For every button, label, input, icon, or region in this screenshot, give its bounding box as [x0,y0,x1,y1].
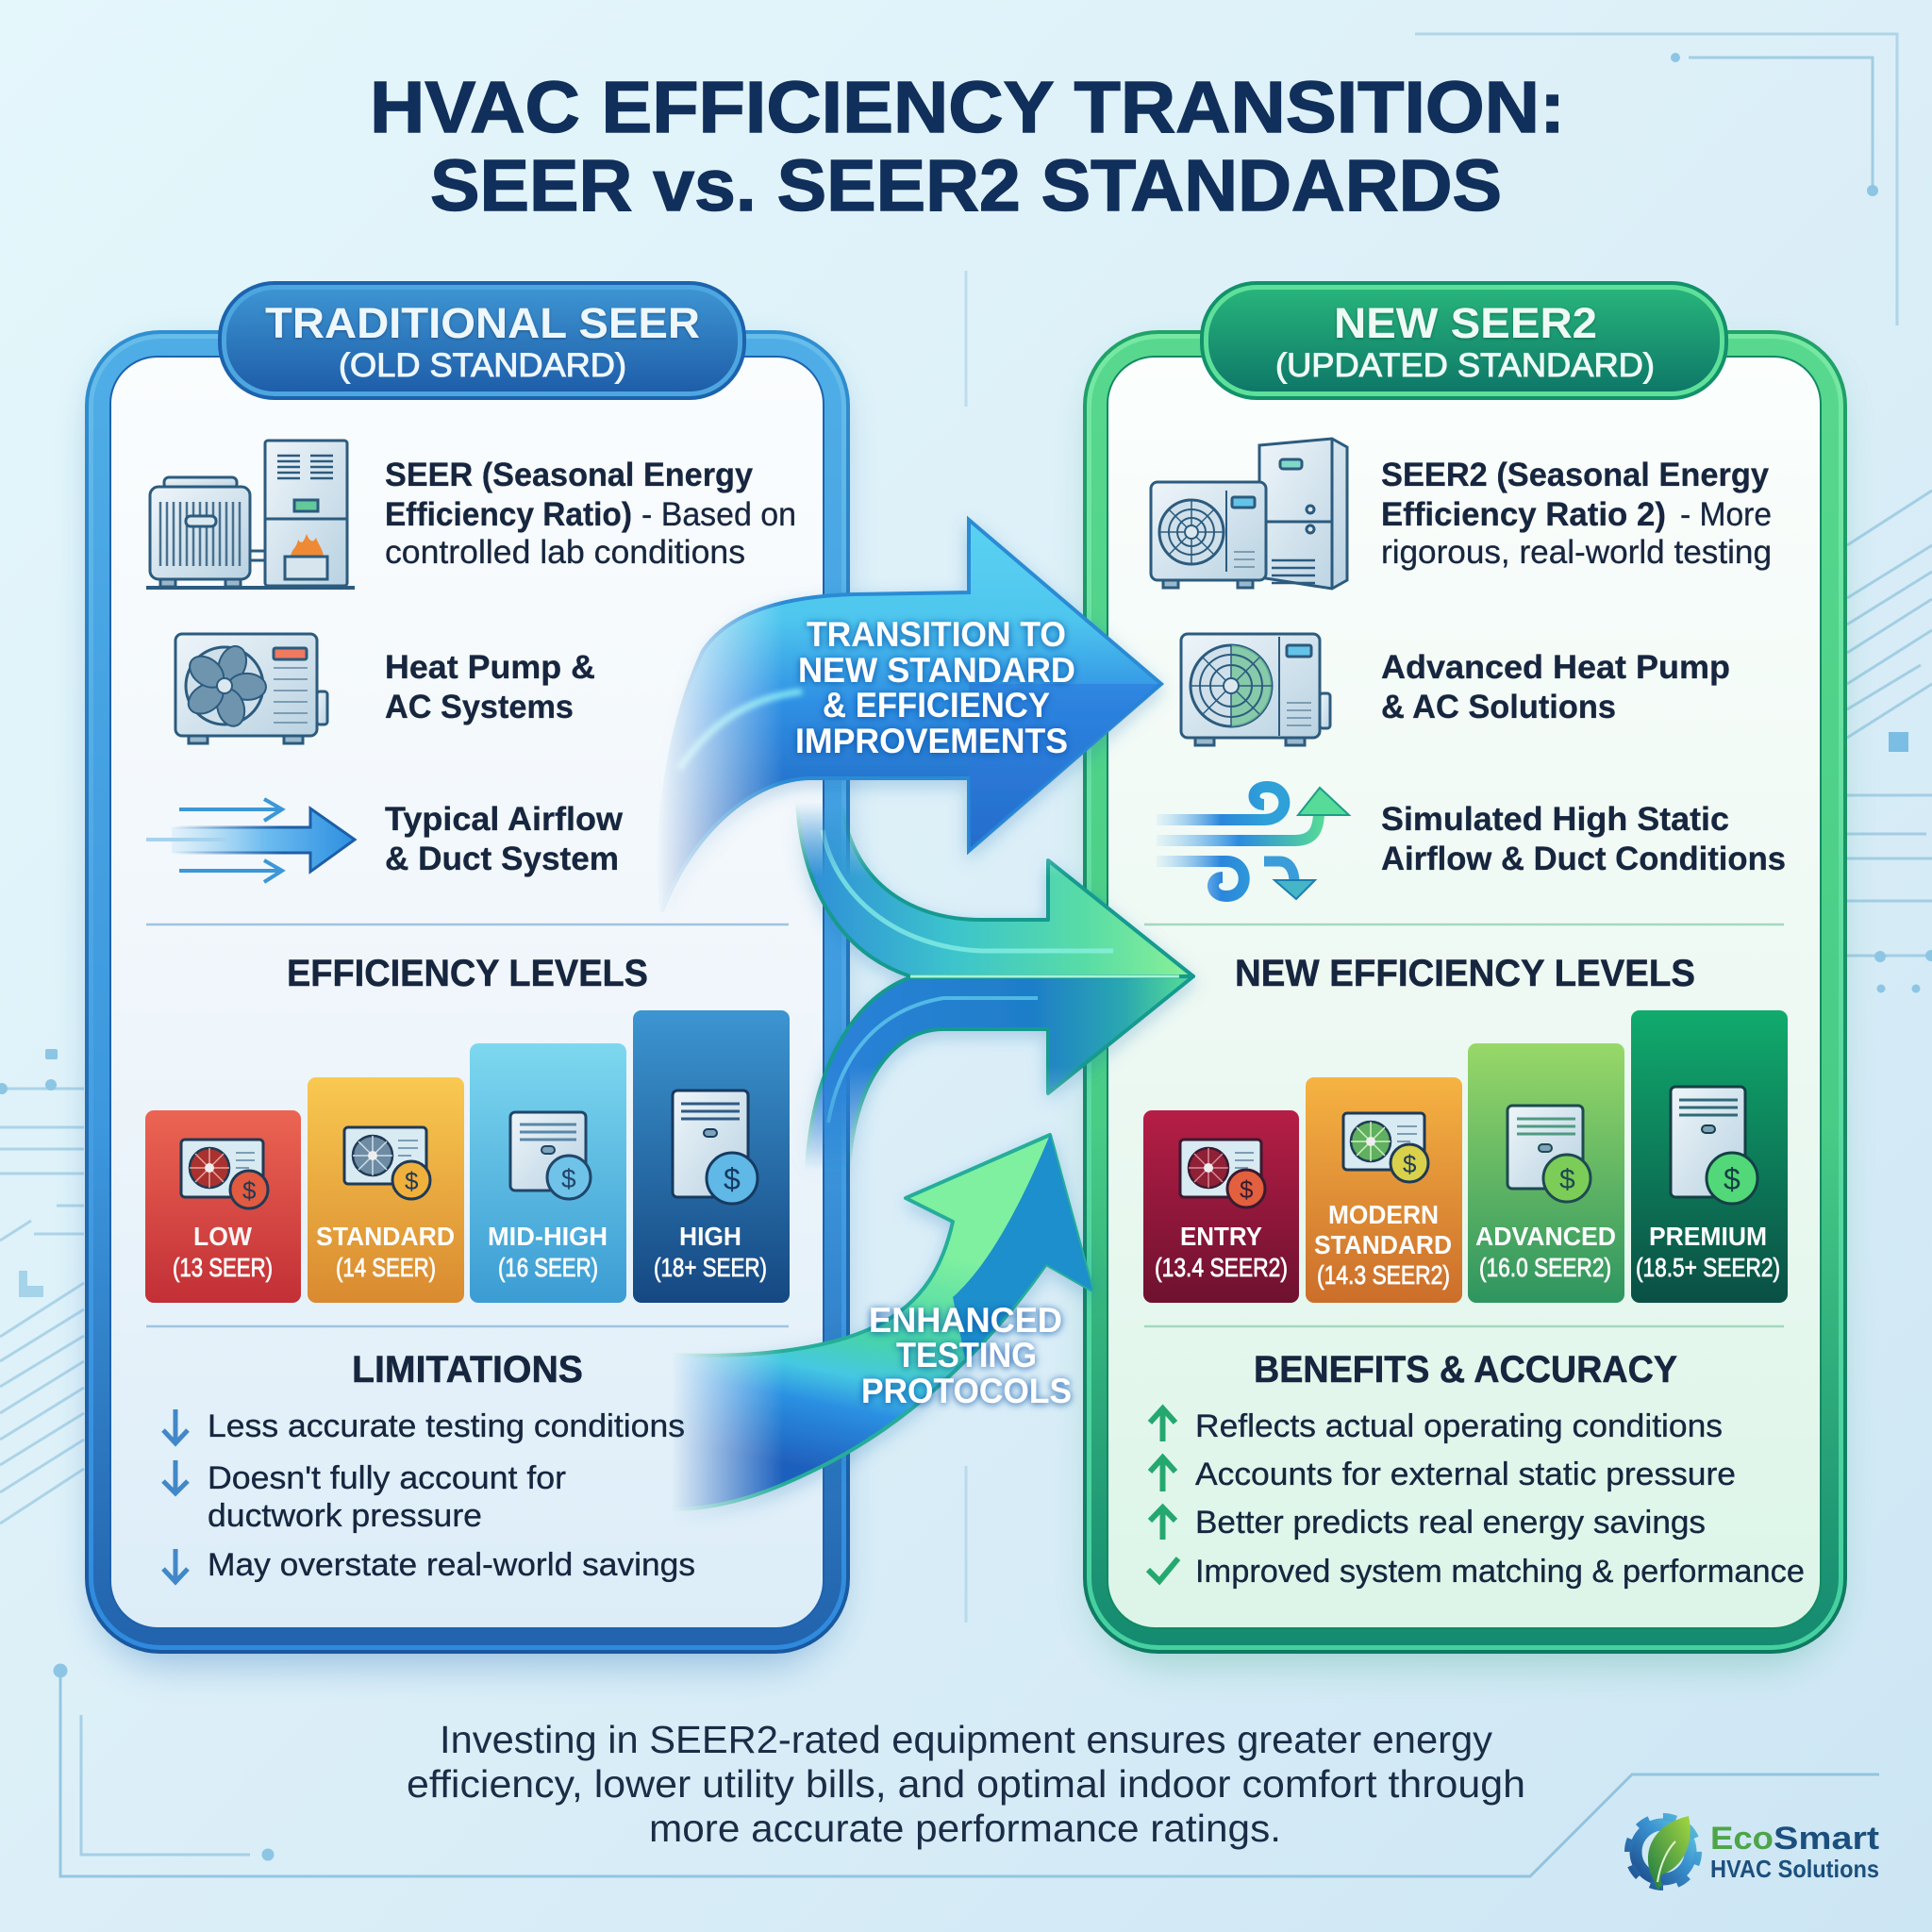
logo: EcoSmart HVAC Solutions: HVAC Solutions [1710,1855,1879,1883]
row text: airflow: & Duct System [385,841,619,877]
row text: high static airflow: Airflow & Duct Conditions [1381,841,1786,877]
bar: modern standard [1306,1077,1462,1303]
bar: premium: PREMIUM [1649,1222,1767,1251]
bar: standard: $ [405,1167,419,1195]
heading: efficiency levels: EFFICIENCY LEVELS [287,953,648,994]
bar: advanced: $ [1559,1164,1575,1195]
closing statement: more accurate performance ratings. [649,1807,1281,1850]
list: limitations: May overstate real-world savings [208,1547,695,1583]
arrow label: transition: TRANSITION TO [807,615,1066,654]
logo: EcoSmart HVAC Solutions [1628,1816,1879,1890]
row text: airflow [385,801,624,877]
icon: modern outdoor and indoor units [1151,439,1347,589]
row text: heat pump: Heat Pump & [385,649,595,686]
icon: gear and leaf [1628,1816,1698,1890]
panel: new SEER2 [1083,281,1847,1665]
bar: premium: $ [1724,1162,1740,1196]
row text: advanced heat pump [1381,649,1730,725]
bar: advanced: (16.0 SEER2) [1479,1253,1611,1282]
bar: low: LOW [193,1222,253,1251]
row text: advanced heat pump: Advanced Heat Pump [1381,649,1730,686]
bar: entry: (13.4 SEER2) [1155,1253,1288,1282]
title: SEER vs. SEER2 STANDARDS [430,145,1502,226]
bar: mid-high: $ [561,1164,576,1193]
bar: standard [308,1077,464,1303]
row text: SEER definition: SEER (Seasonal Energy [385,457,754,493]
arrow label: transition: IMPROVEMENTS [795,722,1068,760]
bar: modern standard: MODERN [1328,1200,1439,1229]
logo: EcoSmart HVAC Solutions: Eco [1710,1821,1774,1857]
bar: high: (18+ SEER) [654,1253,767,1282]
bar: low: (13 SEER) [173,1253,273,1282]
bar: entry: ENTRY [1180,1222,1262,1251]
panel header pill: traditional SEER: TRADITIONAL SEER [265,299,700,347]
bar: low: $ [242,1176,257,1205]
row text: SEER2 definition: SEER2 (Seasonal Energy [1381,457,1770,493]
row text: SEER definition: controlled lab conditions [385,534,745,571]
arrow label: transition [795,615,1075,760]
bar: advanced [1468,1043,1624,1303]
arrow label: enhanced testing [861,1301,1072,1410]
row text: heat pump [385,649,595,725]
row text: SEER definition: - Based on [641,496,796,533]
panel: traditional SEER [85,281,850,1665]
row text: high static airflow: Simulated High Static [1381,801,1729,838]
panel header pill: new SEER2: NEW SEER2 [1334,299,1597,347]
row text: SEER2 definition: rigorous, real-world testing [1381,534,1772,571]
list: benefits: Accounts for external static pressure [1195,1457,1736,1492]
heading: new efficiency levels: NEW EFFICIENCY LEVELS [1235,953,1695,994]
row text: SEER2 definition: - More [1680,496,1772,533]
bar: mid-high: MID-HIGH [488,1222,608,1251]
heading: benefits and accuracy: BENEFITS & ACCURACY [1254,1349,1677,1391]
title [370,67,1565,226]
bar: high [633,1010,790,1303]
icon: advanced heat pump [1181,634,1330,745]
panel header pill: traditional SEER [218,281,746,400]
row text: SEER2 definition: Efficiency Ratio 2) [1381,496,1666,533]
row text: advanced heat pump: & AC Solutions [1381,689,1616,725]
row text: high static airflow [1381,801,1786,877]
list: benefits: Better predicts real energy savings [1195,1505,1706,1541]
bar: standard: STANDARD [316,1222,455,1251]
closing statement: Investing in SEER2-rated equipment ensures greater energy [440,1718,1493,1761]
arrow: transition to new standard [659,520,1161,911]
closing statement: efficiency, lower utility bills, and optimal indoor comfort through [407,1762,1525,1806]
bar: high: $ [724,1162,741,1196]
bar: mid-high: (16 SEER) [498,1253,598,1282]
list: limitations: Doesn't fully account for [208,1460,566,1496]
icon: simulated high static airflow [1157,787,1349,899]
bar chart: efficiency levels [145,1010,790,1303]
heading: limitations: LIMITATIONS [352,1349,583,1391]
arrow label: enhanced testing: PROTOCOLS [861,1372,1072,1410]
arrow label: enhanced testing: ENHANCED [869,1301,1062,1340]
row text: heat pump: AC Systems [385,689,574,725]
bar: modern standard: (14.3 SEER2) [1317,1260,1450,1290]
bar: standard: (14 SEER) [336,1253,436,1282]
bar: premium [1631,1010,1788,1303]
bar chart: new efficiency levels [1143,1010,1788,1303]
title: HVAC EFFICIENCY TRANSITION: [370,67,1565,148]
arrow label: transition: NEW STANDARD [798,651,1075,690]
bar: advanced: ADVANCED [1475,1222,1616,1251]
bar: entry [1143,1110,1299,1303]
bar: mid-high [470,1043,626,1303]
row text: SEER definition [385,457,796,571]
list: benefits: Reflects actual operating conditions [1195,1408,1723,1444]
list: limitations: ductwork pressure [208,1498,482,1534]
bar: low [145,1110,301,1303]
arrow: enhanced testing protocols [672,1135,1092,1509]
bar: modern standard: $ [1403,1150,1417,1178]
list: benefits: Improved system matching & performance [1195,1554,1805,1590]
logo: EcoSmart HVAC Solutions: Smart [1774,1821,1879,1857]
panel header pill: new SEER2: (UPDATED STANDARD) [1275,347,1655,384]
panel header pill: new SEER2 [1200,281,1728,400]
list: limitations [163,1408,695,1583]
list: benefits [1148,1408,1805,1590]
bar: entry: $ [1240,1175,1254,1204]
bar: modern standard: STANDARD [1314,1230,1452,1259]
closing statement [407,1718,1525,1850]
row text: airflow: Typical Airflow [385,801,624,838]
icon: airflow arrow [146,799,355,882]
row text: SEER2 definition [1381,457,1772,571]
list: limitations: Less accurate testing conditions [208,1408,685,1444]
arrow label: transition: & EFFICIENCY [823,686,1050,724]
arrow: combined green arrow [797,802,1193,1170]
icon: condenser and furnace [146,441,355,588]
panel header pill: traditional SEER: (OLD STANDARD) [339,347,626,384]
row text: SEER definition: Efficiency Ratio) [385,496,632,533]
icon: heat pump [175,634,327,743]
arrow label: enhanced testing: TESTING [896,1336,1037,1374]
bar: high: HIGH [679,1222,741,1251]
bar: premium: (18.5+ SEER2) [1636,1253,1780,1282]
